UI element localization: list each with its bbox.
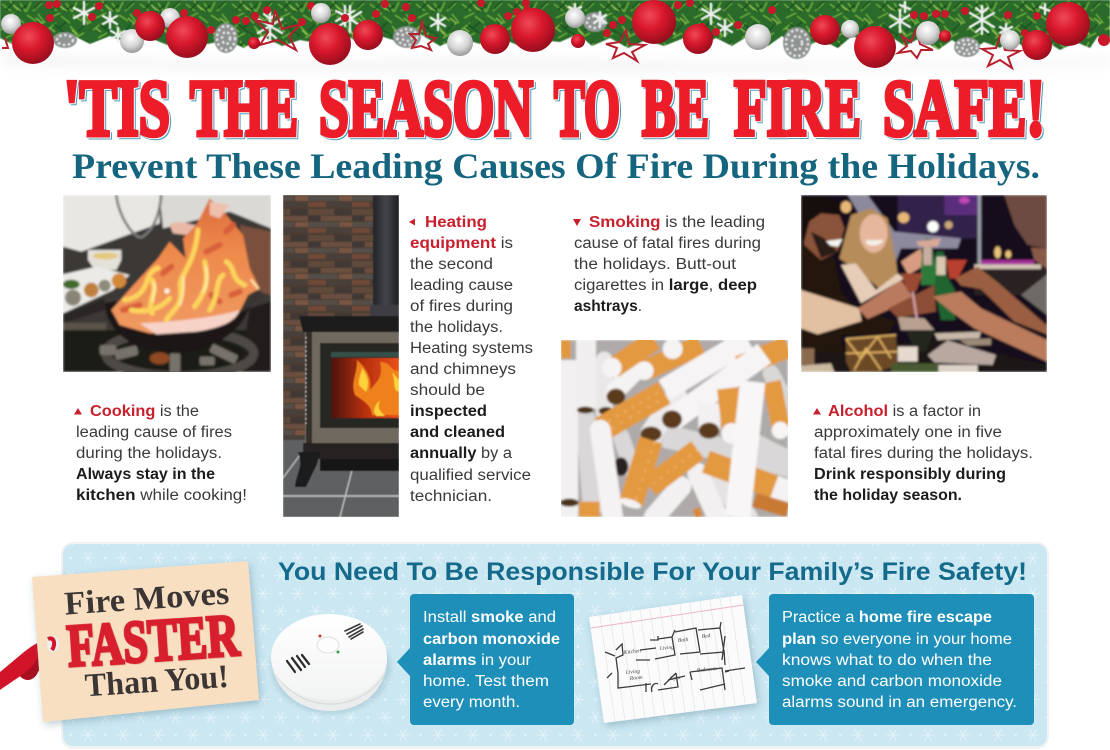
callout: escape plan: Practice a home fire escape (782, 609, 992, 626)
text: smoking: ashtrays. (574, 298, 642, 315)
callout: escape plan: plan so everyone in your home (782, 631, 1012, 648)
red berries (45, 0, 1110, 46)
photo: friends toasting with drinks (801, 195, 1047, 372)
title: SEASON (319, 65, 533, 153)
panel: family fire safety (61, 542, 1049, 749)
text: alcohol: approximately one in five (814, 424, 1002, 441)
icon: hand-drawn escape plan on notebook paper: Bed (702, 633, 711, 640)
icon: hand-drawn escape plan on notebook paper: Bedroom (697, 666, 717, 674)
text: cooking: Always stay in the (76, 466, 215, 483)
icon: smoke alarm (271, 614, 391, 714)
icon: hand-drawn escape plan on notebook paper: Room (629, 675, 643, 682)
photo: pile of cigarettes (560, 339, 794, 517)
text: alcohol: Drink responsibly during (814, 466, 1006, 483)
tag: fire moves faster than you: Fire Moves (63, 576, 230, 623)
callout: escape plan: alarms sound in an emergency. (782, 694, 1017, 711)
icon: hand-drawn escape plan on notebook paper: Living (659, 645, 674, 652)
icon: hand-drawn escape plan on notebook paper: Bath (678, 637, 689, 644)
callout: smoke alarms: home. Test them (423, 673, 549, 690)
text: heating equipment: of fires during (410, 298, 513, 315)
title: 'TIS (64, 65, 170, 153)
text: heating equipment: technician. (410, 488, 492, 505)
title: BE (642, 65, 709, 153)
text: heating equipment: the second (410, 256, 493, 273)
icon: hand-drawn escape plan on notebook paper: Kitchen (623, 648, 641, 656)
text: smoking (573, 214, 765, 315)
callout: escape plan (756, 594, 1034, 725)
text: heating equipment: Heating (425, 214, 487, 231)
text: cooking: Cooking is the (90, 403, 199, 420)
garland of pine, baubles and stars (0, 0, 1110, 74)
tag: fire moves faster than you: Than You! (84, 659, 230, 704)
icon: hand-drawn escape plan on notebook paper: Living (625, 669, 640, 676)
text: heating equipment: qualified service (410, 467, 531, 484)
text: smoking: the holidays. Butt-out (574, 256, 737, 273)
subtitle: Prevent These Leading Causes Of Fire During the Holidays. (72, 146, 1040, 186)
callout: smoke alarms: every month. (423, 694, 520, 711)
icon: red ribbon (0, 640, 54, 690)
title: TO (554, 65, 620, 153)
callout: smoke alarms: carbon monoxide (423, 631, 560, 648)
text: heating equipment (409, 214, 533, 505)
callout: escape plan: knows what to do when the (782, 652, 992, 669)
text: alcohol (813, 403, 1033, 504)
text: smoking: cigarettes in large, deep (574, 277, 757, 294)
text: smoking: cause of fatal fires during (574, 235, 761, 252)
icon: hand-drawn escape plan on notebook paper: Gym (670, 675, 681, 682)
photo: wok flames on a stove (63, 195, 271, 376)
text: alcohol: the holiday season. (814, 487, 962, 504)
text: heating equipment: leading cause (410, 277, 513, 294)
text: smoking: Smoking is the leading (589, 214, 765, 231)
text: heating equipment: equipment is (410, 235, 513, 252)
text: cooking: leading cause of fires (76, 424, 232, 441)
text: heating equipment: the holidays. (410, 319, 503, 336)
text: heating equipment: and cleaned (410, 424, 505, 441)
callout: smoke alarms (397, 594, 574, 725)
star ornaments (2, 10, 1020, 68)
text: heating equipment: Heating systems (410, 340, 533, 357)
pine cones (53, 12, 980, 59)
text: heating equipment: annually by a (410, 445, 512, 462)
text: cooking (74, 403, 247, 504)
text: heating equipment: and chimneys (410, 361, 516, 378)
callout: smoke alarms: alarms in your (423, 652, 531, 669)
title: FIRE (734, 65, 861, 153)
tag: fire moves faster than you: FASTER (65, 602, 242, 679)
text: alcohol: Alcohol is a factor in (828, 403, 981, 420)
title (64, 65, 1045, 153)
title: THE (190, 65, 298, 153)
text: heating equipment: should be (410, 382, 485, 399)
text: alcohol: fatal fires during the holidays. (814, 445, 1033, 462)
tag: fire moves faster than you (32, 561, 259, 722)
icon: hand-drawn escape plan on notebook paper (589, 595, 757, 723)
callout: smoke alarms: Install smoke and (423, 609, 556, 626)
red baubles (12, 0, 1090, 68)
silver baubles (1, 3, 1020, 56)
title: SAFE! (883, 65, 1045, 153)
snowflakes (74, 2, 1050, 42)
text: heating equipment: inspected (410, 403, 487, 420)
text: cooking: kitchen while cooking! (76, 487, 247, 504)
photo: wood stove against brick wall (283, 195, 399, 517)
panel heading: You Need To Be Responsible For Your Family’s Fire Safety! (278, 558, 1027, 586)
callout: escape plan: smoke and carbon monoxide (782, 673, 1002, 690)
text: cooking: during the holidays. (76, 445, 222, 462)
